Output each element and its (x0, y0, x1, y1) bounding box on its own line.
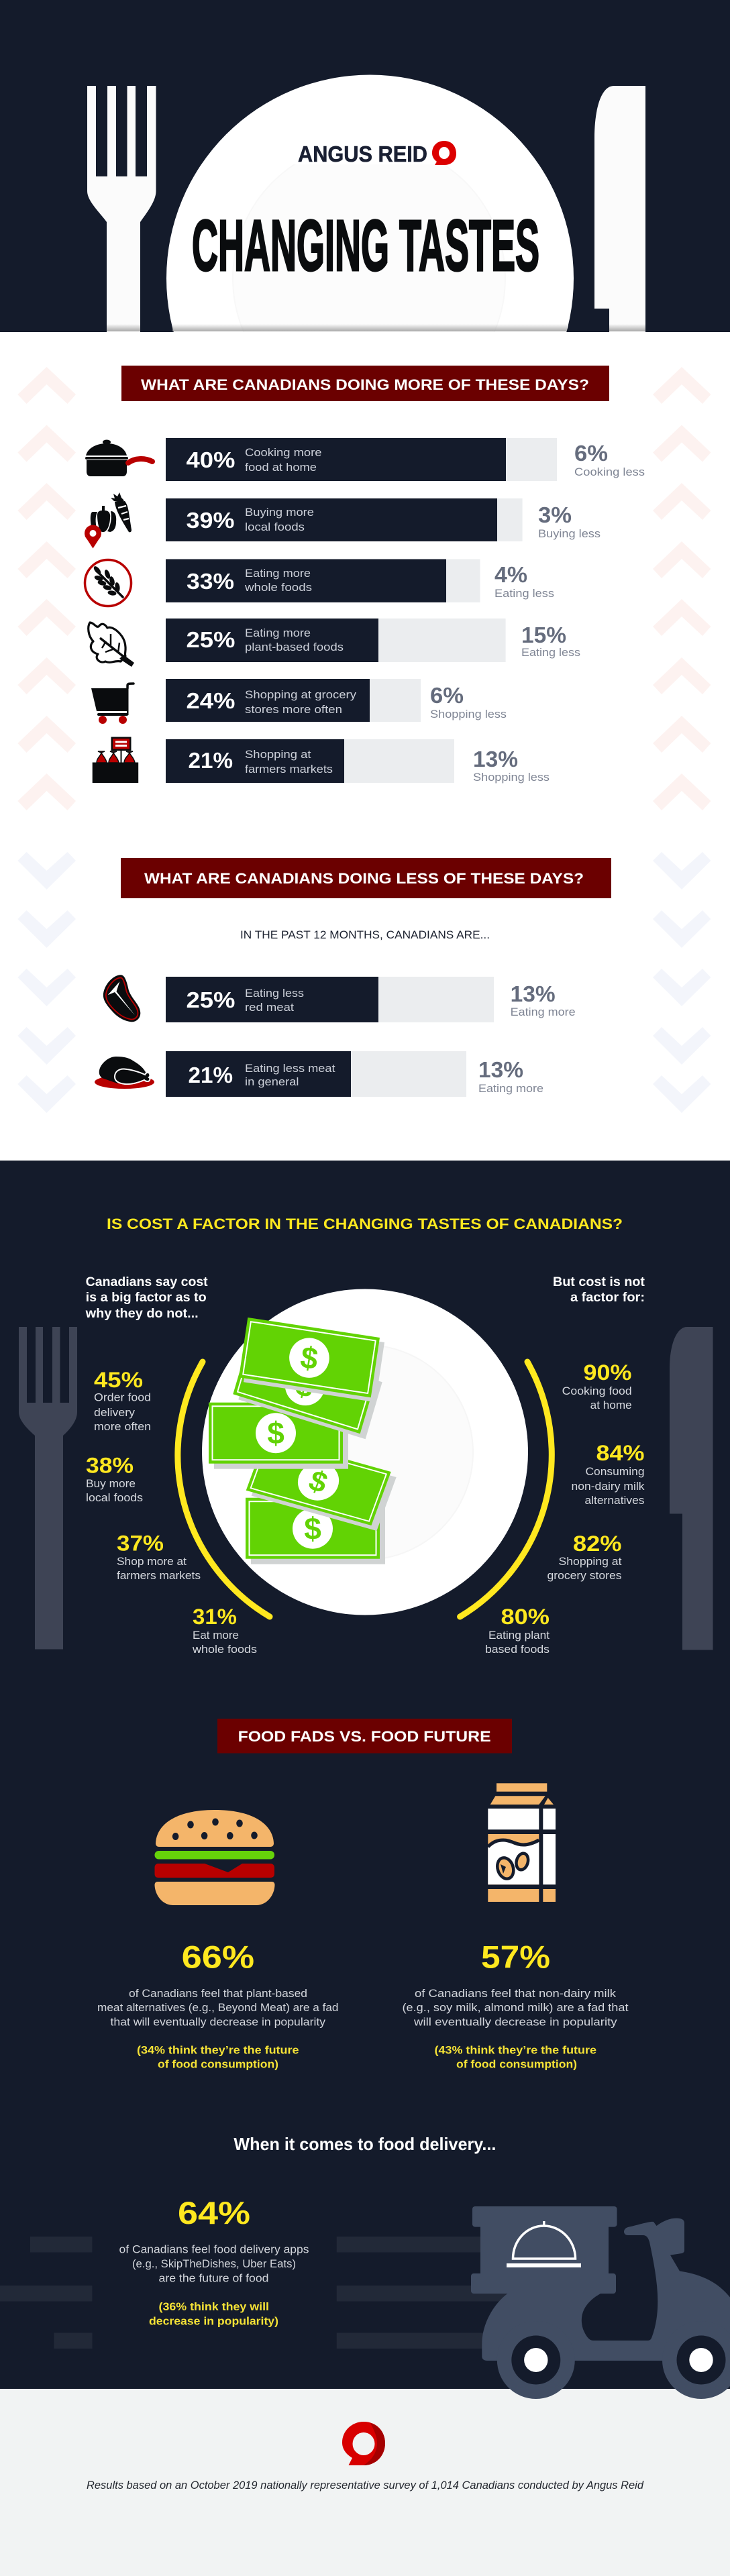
stat: 45%: delivery (94, 1406, 136, 1419)
row: local foods: local foods (245, 521, 305, 533)
stat: 82%: 82% (573, 1532, 621, 1556)
stat: 57%: will eventually decrease in popularity (413, 2015, 617, 2029)
row: whole foods: 33% (187, 569, 234, 594)
stat: 90%: at home (590, 1399, 632, 1411)
stat: 37%: 37% (117, 1531, 164, 1555)
row: red meat: Eating more (511, 1006, 576, 1018)
row: meat in general: Eating less meat (245, 1062, 335, 1075)
row: plant-based: plant-based foods (245, 641, 344, 653)
stat: 90%: Cooking food (562, 1385, 632, 1397)
stat: 66% (97, 1939, 338, 2070)
stat: 37%: Shop more at (117, 1555, 187, 1568)
stat: 45%: more often (94, 1420, 151, 1433)
stat: 57% (403, 1939, 629, 2070)
text: cost left intro: why they do not... (85, 1307, 199, 1321)
footer panel (0, 2389, 730, 2576)
row: plant-based: Eating more (245, 627, 311, 639)
arc: right (460, 1362, 552, 1617)
stat: 57%: of food consumption) (456, 2058, 577, 2070)
icon: money pile: $ (305, 1464, 332, 1499)
stat: 84%: alternatives (585, 1494, 644, 1507)
stat: 64% (119, 2195, 309, 2328)
stat: 84%: Consuming (585, 1465, 644, 1478)
stat: 64%: of Canadians feel food delivery apps (119, 2243, 309, 2255)
icon: burger (154, 1810, 275, 1905)
heading: food fads (217, 1719, 512, 1754)
heading: doing more: WHAT ARE CANADIANS DOING MORE OF THESE DAYS? (141, 376, 589, 393)
stat: 82%: Shopping at (558, 1555, 622, 1568)
row: local foods: 39% (187, 508, 235, 533)
text: cost left intro: is a big factor as to (86, 1291, 207, 1305)
stat: 84%: non-dairy milk (572, 1480, 645, 1493)
icon: money pile (209, 1318, 397, 1564)
stat: 66%: of Canadians feel that plant-based (129, 1987, 307, 2000)
icon: wheat in circle (85, 559, 132, 606)
row: farmers markets: Shopping at (245, 748, 311, 761)
icon: money pile: $ (267, 1415, 284, 1450)
row: farmers markets: farmers markets (245, 763, 333, 775)
stat: 38%: 38% (86, 1453, 134, 1477)
row: grocery: stores more often (245, 703, 342, 716)
stat: 80%: based foods (485, 1643, 550, 1656)
text: cost left intro (85, 1275, 208, 1321)
row: plant-based: 25% (187, 627, 235, 652)
text: cost right intro (553, 1275, 645, 1305)
stat: 90% (562, 1360, 632, 1411)
icon: knife (594, 86, 645, 332)
stat: 80%: Eating plant (488, 1629, 550, 1642)
stat: 66%: that will eventually decrease in popularity (110, 2015, 326, 2029)
stat: 45% (94, 1368, 151, 1433)
icon: pot (85, 440, 152, 476)
stat: 82% (548, 1532, 622, 1582)
panel: doing more / doing less (0, 332, 730, 1161)
stat: 38% (86, 1453, 143, 1504)
row: cooking: 40% (187, 447, 235, 472)
stat: 64%: decrease in popularity) (149, 2314, 278, 2328)
stat: 37%: farmers markets (117, 1569, 201, 1582)
row: red meat: 25% (187, 987, 235, 1012)
row: local foods: 3% (538, 502, 572, 527)
row: plant-based (89, 619, 580, 667)
wheel: rear (497, 2321, 575, 2399)
text: cost right intro: But cost is not (553, 1275, 645, 1289)
stat: 64%: are the future of food (158, 2271, 268, 2285)
stat: 31%: whole foods (192, 1643, 257, 1656)
logo mark (342, 2422, 385, 2465)
row: red meat: Eating less (245, 987, 304, 1000)
stat: 57%: (43% think they’re the future (435, 2043, 596, 2057)
icon: roast chicken (95, 1057, 154, 1089)
stat: 66%: (34% think they’re the future (137, 2043, 299, 2057)
row: cooking: Cooking more (245, 446, 322, 459)
icon: money pile: $ (304, 1511, 321, 1546)
heading: food delivery: When it comes to food delivery... (233, 2134, 496, 2154)
icon: dim knife (670, 1327, 713, 1650)
stat: 45%: 45% (94, 1368, 143, 1392)
row: meat in general: 21% (188, 1063, 233, 1087)
row: grocery: Shopping less (430, 708, 507, 720)
stat: 31%: 31% (193, 1605, 237, 1629)
stat: 82%: grocery stores (548, 1569, 621, 1582)
stat: 64%: (e.g., SkipTheDishes, Uber Eats) (132, 2257, 296, 2270)
row: farmers markets: Shopping less (473, 771, 550, 784)
icon: market crate (93, 737, 138, 783)
row: local foods (85, 492, 601, 549)
logo: Angus Reid: ANGUS REID (298, 142, 427, 166)
row: farmers markets: 21% (188, 748, 233, 773)
arc: left (178, 1362, 270, 1617)
stat: 37% (117, 1531, 201, 1582)
row: grocery: Shopping at grocery (245, 688, 357, 701)
icon: delivery scooter (471, 2206, 730, 2399)
row: farmers markets (93, 737, 550, 784)
row: red meat: red meat (245, 1001, 294, 1014)
text: cost left intro: Canadians say cost (86, 1275, 208, 1289)
stat: 38%: Buy more (86, 1477, 136, 1490)
stat: 90%: 90% (584, 1360, 632, 1385)
icon: vegetables and pin (85, 492, 132, 549)
row: grocery: 24% (187, 688, 235, 713)
row: plant-based: Eating less (521, 646, 580, 659)
stat: 84%: 84% (596, 1441, 644, 1465)
icon: money pile: $ (292, 1367, 318, 1405)
row: red meat: 13% (511, 981, 556, 1006)
icon: steak (103, 975, 140, 1022)
stat: 38%: local foods (86, 1491, 143, 1504)
stat: 66%: meat alternatives (e.g., Beyond Meat) are a fad (97, 2001, 338, 2014)
row: meat in general: Eating more (478, 1082, 543, 1095)
stat: 80% (485, 1605, 550, 1656)
row: meat in general (95, 1051, 543, 1097)
row: plant-based: 15% (521, 623, 566, 647)
stat: 80%: 80% (501, 1605, 550, 1629)
row: meat in general: 13% (478, 1057, 523, 1082)
stat: 66%: of food consumption) (158, 2058, 278, 2070)
icon: leaf (89, 623, 134, 667)
panel: cost, fads and delivery (0, 1161, 730, 2389)
stat: 45%: Order food (94, 1391, 151, 1403)
row: whole foods: 4% (494, 562, 527, 587)
row: cooking: 6% (574, 441, 608, 466)
icon: fork (87, 86, 156, 332)
row: whole foods (85, 559, 554, 606)
text: cost right intro: a factor for: (570, 1291, 645, 1305)
icon: milk carton (488, 1783, 556, 1902)
stat: 31% (192, 1605, 257, 1656)
stat: 57%: 57% (481, 1939, 550, 1975)
row: cooking: food at home (245, 461, 317, 474)
heading: cost factor: IS COST A FACTOR IN THE CHANGING TASTES OF CANADIANS? (107, 1216, 623, 1232)
row: whole foods: Eating more (245, 567, 311, 580)
heading: doing less: WHAT ARE CANADIANS DOING LESS OF THESE DAYS? (144, 870, 584, 887)
row: grocery (91, 679, 507, 724)
row: whole foods: whole foods (244, 581, 312, 594)
header panel (0, 0, 730, 482)
source note: Results based on an October 2019 nationally representative survey of 1,014 Canadians conducted by Angus Reid (87, 2479, 644, 2491)
icon: white plate (166, 75, 574, 482)
icon: plate (202, 1289, 528, 1615)
stat: 64%: 64% (178, 2195, 250, 2231)
icon: shopping cart (91, 684, 134, 724)
row: cooking (85, 438, 645, 481)
row: local foods: Buying more (245, 506, 314, 519)
heading: doing less (121, 858, 611, 898)
heading: doing more (121, 366, 609, 401)
subheading: IN THE PAST 12 MONTHS, CANADIANS ARE... (240, 929, 490, 941)
row: meat in general: in general (245, 1075, 299, 1088)
wheel: front (662, 2321, 730, 2399)
icon: money pile: $ (299, 1340, 320, 1377)
row: whole foods: Eating less (494, 587, 554, 600)
row: cooking: Cooking less (574, 466, 645, 478)
stat: 57%: (e.g., soy milk, almond milk) are a fad that (403, 2001, 629, 2014)
icon: dim fork (19, 1327, 77, 1649)
icon: cloche (507, 2221, 581, 2267)
row: local foods: Buying less (538, 527, 601, 540)
stat: 57%: of Canadians feel that non-dairy milk (415, 1987, 617, 2000)
stat: 66%: 66% (182, 1939, 254, 1975)
row: red meat (103, 975, 576, 1022)
stat: 64%: (36% think they will (158, 2300, 269, 2313)
row: farmers markets: 13% (473, 747, 518, 771)
stat: 31%: Eat more (193, 1629, 239, 1642)
row: grocery: 6% (430, 683, 464, 708)
heading: food fads: FOOD FADS VS. FOOD FUTURE (238, 1728, 491, 1745)
stat: 84% (572, 1441, 645, 1507)
